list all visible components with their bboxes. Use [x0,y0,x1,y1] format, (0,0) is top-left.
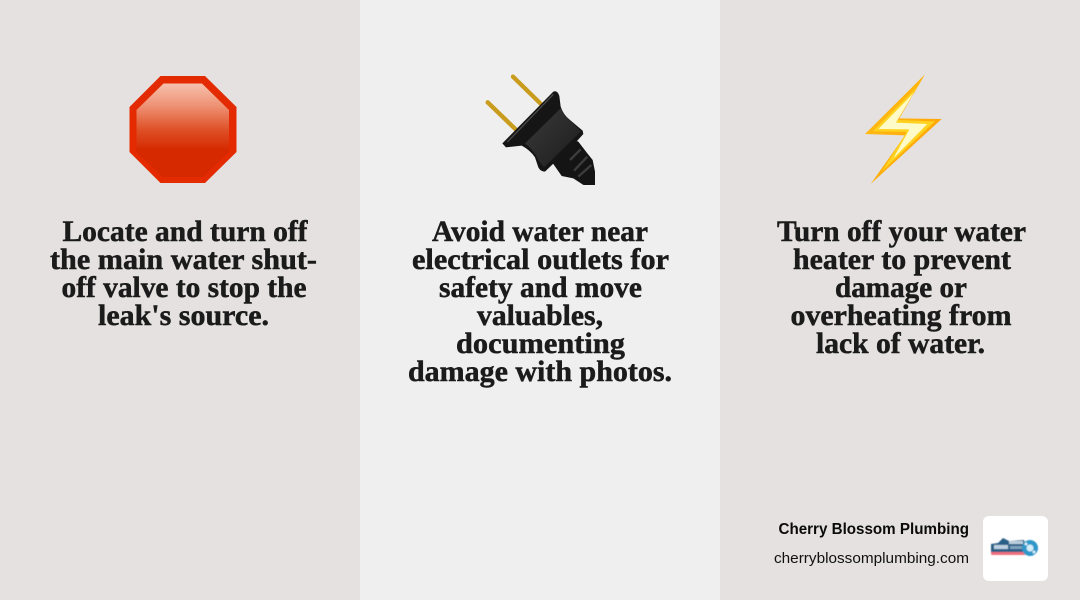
text block: avoid water near outlets: safety and move [439,271,642,304]
text block: turn off water heater: Turn off your water [777,215,1026,248]
text block: shut off main valve: leak's source. [98,299,269,332]
text block: avoid water near outlets: valuables, [477,299,603,332]
panel: right column background [720,0,1080,600]
text block: turn off water heater: lack of water. [816,327,985,360]
text block: avoid water near outlets: electrical outlets for [412,243,669,276]
icon: red stop sign [130,76,236,183]
website url: cherryblossomplumbing.com [774,551,969,567]
text block: shut off main valve: the main water shut- [50,243,317,276]
text block: turn off water heater: heater to prevent [793,243,1011,276]
logo card [983,516,1048,581]
icon: lightning bolt [865,74,942,184]
brand name: Cherry Blossom Plumbing [778,521,969,538]
text block: shut off main valve [50,215,317,332]
text block: avoid water near outlets: Avoid water near [432,215,648,248]
text block: avoid water near outlets [408,215,672,388]
text block: avoid water near outlets: documenting [456,327,625,360]
text block: shut off main valve: Locate and turn off [62,215,308,248]
panel: middle column background [360,0,720,600]
panel: left column background [0,0,360,600]
text block: shut off main valve: off valve to stop the [62,271,306,304]
text block: turn off water heater: overheating from [790,299,1012,332]
text block: avoid water near outlets: damage with photos. [408,355,672,388]
icon: electrical plug [488,77,598,186]
text block: turn off water heater [777,215,1026,360]
text block: turn off water heater: damage or [835,271,967,304]
